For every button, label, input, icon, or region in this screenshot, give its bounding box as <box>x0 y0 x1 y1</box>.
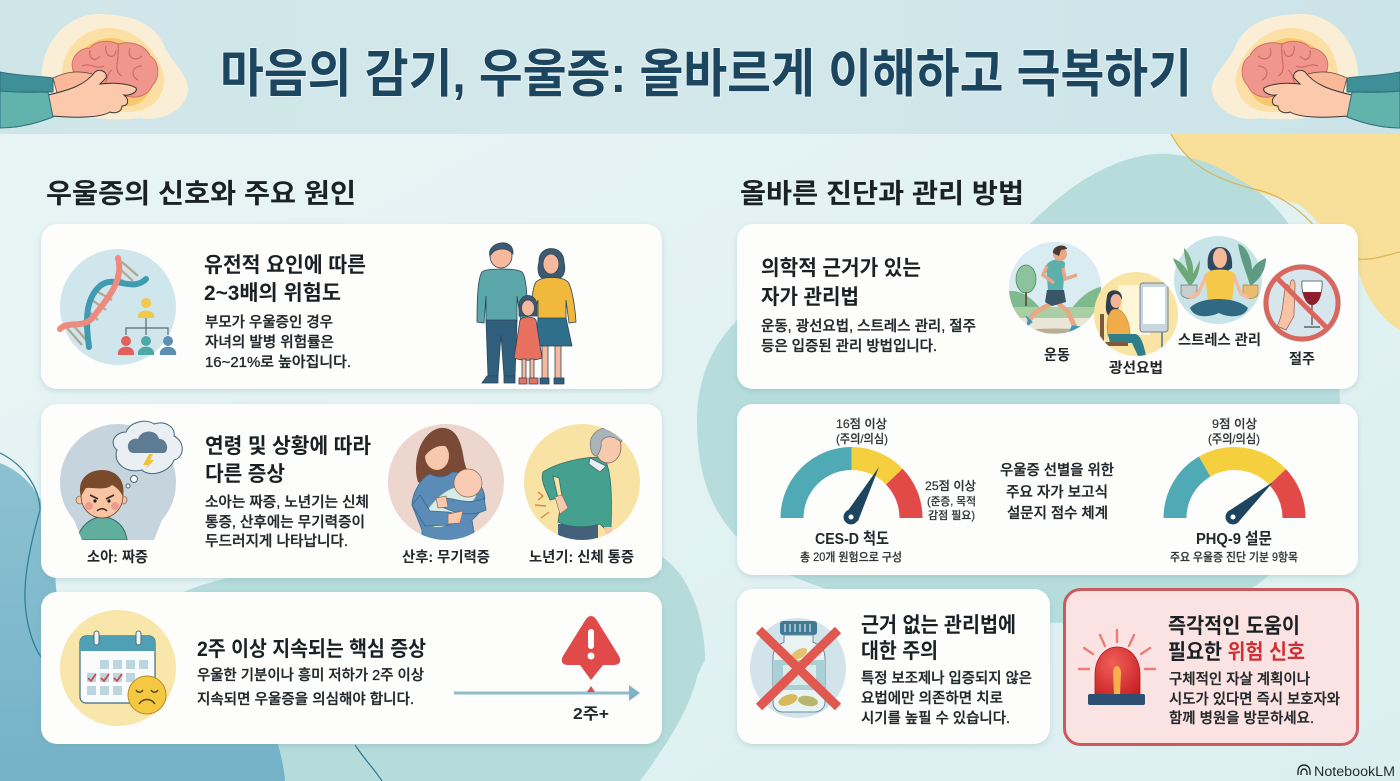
gauge label: 9 points <box>1208 417 1260 446</box>
card text: 소아는 짜증, 노년기는 신체 <box>205 494 369 511</box>
panel: evidence-based self-care <box>737 224 1358 389</box>
icon: DNA and family tree <box>60 249 176 365</box>
timeline label: 2주+ <box>573 706 609 723</box>
icon label: 노년기: 신체 통증 <box>529 549 634 566</box>
card text: 자녀의 발병 위험률은 <box>205 334 334 351</box>
gauge caption: CES-D: CES-D 척도 <box>815 530 889 548</box>
card heading: 근거 없는 관리법에 <box>861 614 1016 637</box>
thought cloud <box>113 421 182 488</box>
gauge caption: CES-D: 총 20개 원험으로 구성 <box>800 550 902 564</box>
gauge label: 25 points: (준증, 목적 <box>927 495 976 508</box>
card heading <box>761 257 921 309</box>
card heading: 유전적 요인에 따른 <box>204 254 366 277</box>
card text: 두드러지게 나타납니다. <box>205 533 348 550</box>
center text: 우울증 선별을 위한 <box>1000 462 1114 479</box>
card heading: 2~3배의 위험도 <box>204 282 341 305</box>
icon: hands holding brain left <box>0 14 188 128</box>
icon label: 소아: 짜증 <box>87 549 148 566</box>
card text <box>761 318 976 355</box>
icon label: 운동 <box>1044 347 1070 364</box>
icon: mother with baby <box>388 424 504 545</box>
icon: meditation <box>1173 236 1266 324</box>
gauge caption: PHQ-9: PHQ-9 설문 <box>1196 530 1272 548</box>
icon: hands holding brain right <box>1212 14 1400 128</box>
gauge label: 25 points: 감점 필요) <box>928 509 975 522</box>
card text: 지속되면 우울증을 의심해야 합니다. <box>197 691 414 708</box>
gauge caption: PHQ-9 <box>1170 530 1298 564</box>
center text <box>1000 462 1114 522</box>
card text <box>205 314 351 371</box>
icon: calendar with sad face <box>60 610 176 726</box>
icon: family <box>477 243 576 384</box>
icon: no alcohol <box>1263 264 1341 342</box>
center text: 주요 자가 보고식 <box>1006 484 1108 501</box>
card text: 등은 입증된 관리 방법입니다. <box>761 338 937 355</box>
panel: danger signal <box>1064 590 1358 744</box>
card text: 특정 보조제나 입증되지 않은 <box>861 670 1032 687</box>
header band <box>0 0 1400 134</box>
card text: 구체적인 자살 계획이나 <box>1169 671 1310 688</box>
gauge label: 16 points: 16점 이상 <box>836 417 887 431</box>
gauge label: 9 points: 9점 이상 <box>1212 417 1257 431</box>
card heading <box>204 254 366 305</box>
card heading: 대한 주의 <box>861 640 938 663</box>
icon label: 광선요법 <box>1109 360 1163 377</box>
card text: 시도가 있다면 즉시 보호자와 <box>1169 691 1340 708</box>
icon: exercise <box>1009 242 1101 334</box>
card heading <box>205 435 371 486</box>
icon: elderly person with back pain <box>524 424 640 545</box>
gauge label: 9 points: (주의/의심) <box>1208 432 1260 446</box>
card heading: 필요한 위험 신호 <box>1168 641 1305 664</box>
icon: crossed-out supplement bottle <box>750 618 846 718</box>
card heading: 연령 및 상황에 따라 <box>205 435 371 458</box>
gauge label: 16 points: (주의/의심) <box>836 432 888 446</box>
chart: CES-D gauge <box>792 458 911 524</box>
watermark: NotebookLM: NotebookLM <box>1314 764 1395 779</box>
gauge label: 25 points: 25점 이상 <box>925 479 976 493</box>
arrow: timeline <box>454 685 640 701</box>
center text: 설문지 점수 체계 <box>1007 505 1108 522</box>
panel: unproven remedies warning <box>737 589 1050 744</box>
card text <box>205 494 369 550</box>
card heading <box>861 614 1016 663</box>
card text: 함께 병원을 방문하세요. <box>1169 710 1314 727</box>
card text <box>861 670 1032 727</box>
card text: 통증, 산후에는 무기력증이 <box>205 514 365 531</box>
panel: screening scales <box>737 404 1358 575</box>
card heading: 즉각적인 도움이 <box>1168 615 1300 638</box>
card heading: 자가 관리법 <box>761 286 859 309</box>
card text: 부모가 우울증인 경우 <box>205 314 333 331</box>
icon: light therapy <box>1094 272 1178 358</box>
icon: irritable child <box>55 420 182 545</box>
card text <box>197 667 424 708</box>
gauge label: 16 points <box>836 417 888 446</box>
card text: 요법에만 의존하면 치로 <box>861 690 1003 707</box>
chart: PHQ-9 gauge <box>1175 459 1294 524</box>
panel: age-related symptoms <box>41 404 662 578</box>
card heading: 의학적 근거가 있는 <box>761 257 921 280</box>
icon label: 절주 <box>1289 351 1315 368</box>
card heading: 다른 증상 <box>205 463 285 486</box>
icon: siren <box>1079 630 1155 705</box>
card heading <box>1168 615 1305 664</box>
card text: 16~21%로 높아집니다. <box>205 354 351 371</box>
card text <box>1169 671 1340 727</box>
panel: two-week symptoms <box>41 592 662 744</box>
title: 마음의 감기, 우울증: 올바르게 이해하고 극복하기 <box>220 46 1192 104</box>
card text: 운동, 광선요법, 스트레스 관리, 절주 <box>761 318 976 335</box>
heading: left section: 우울증의 신호와 주요 원인 <box>46 179 356 209</box>
card text: 우울한 기분이나 흥미 저하가 2주 이상 <box>197 667 424 684</box>
card text: 시기를 높필 수 있습니다. <box>861 710 1010 727</box>
icon label: 스트레스 관리 <box>1178 332 1261 349</box>
panel: genetic factors <box>41 224 662 389</box>
gauge label: 25 points <box>925 479 976 522</box>
gauge caption: CES-D <box>800 530 902 564</box>
icon: warning triangle <box>562 616 620 692</box>
icon label: 산후: 무기력증 <box>402 549 490 566</box>
heading: right section: 올바른 진단과 관리 방법 <box>740 179 1024 209</box>
gauge caption: PHQ-9: 주요 우울증 진단 기분 9항목 <box>1170 551 1298 564</box>
card heading: 2주 이상 지속되는 핵심 증상 <box>197 638 426 661</box>
